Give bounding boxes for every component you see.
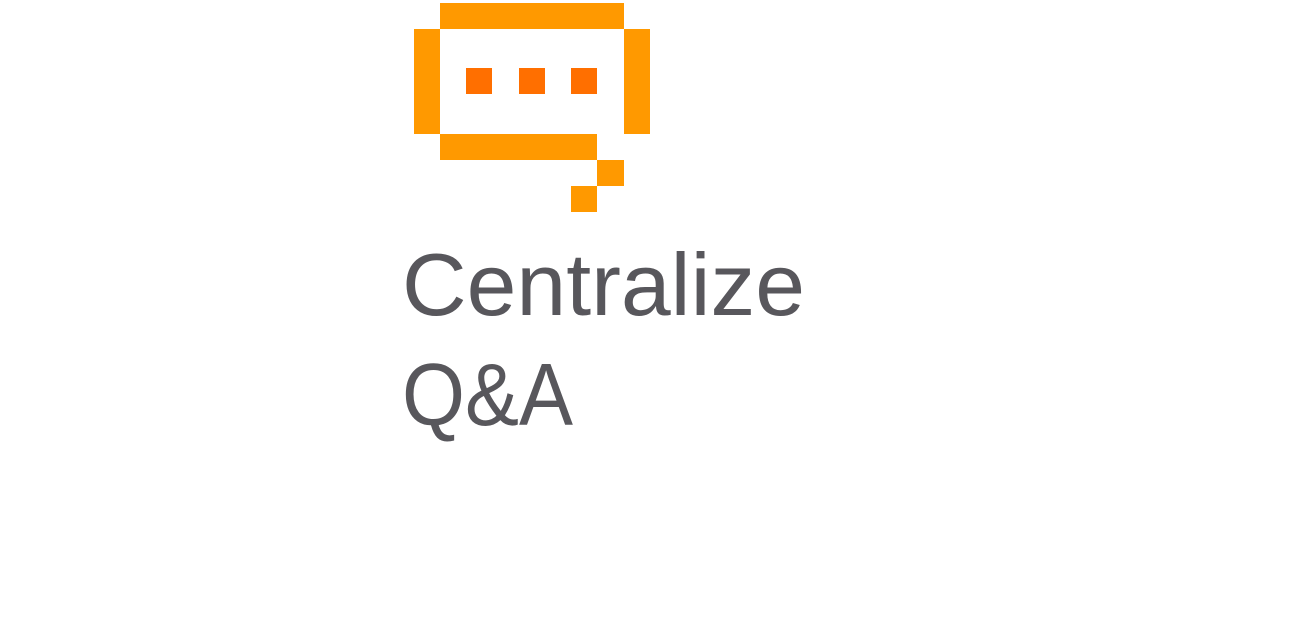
title: Q&A xyxy=(402,345,573,444)
title xyxy=(402,235,805,444)
icon: pixel speech bubble xyxy=(414,3,650,212)
title: Centralize xyxy=(402,235,805,334)
